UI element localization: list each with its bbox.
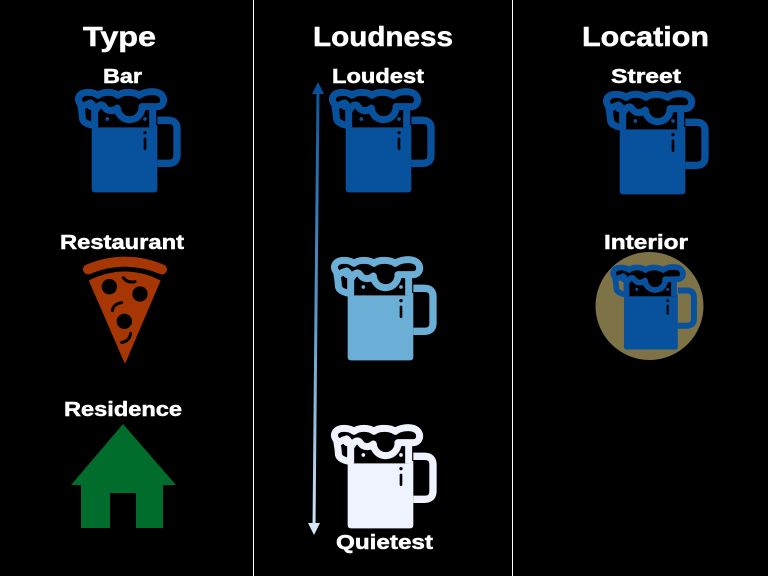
panel: loudness — [308, 21, 453, 554]
icon: pizza slice — [88, 262, 162, 363]
icon: interior beer mug — [613, 267, 694, 350]
panel: location — [582, 21, 709, 360]
label: Street: Street — [611, 66, 681, 88]
label: Residence: Residence — [64, 399, 182, 421]
heading: Location: Location — [582, 21, 709, 52]
label: Restaurant: Restaurant — [60, 232, 184, 254]
label: Loudest: Loudest — [332, 66, 424, 88]
icon: quiet beer mug — [334, 428, 433, 528]
label: Quietest: Quietest — [336, 532, 433, 554]
divider: right — [512, 0, 513, 576]
panel: type — [60, 21, 184, 528]
heading: Type: Type — [83, 21, 156, 52]
arrow: loudness scale — [308, 82, 324, 535]
heading: Loudness: Loudness — [313, 21, 453, 52]
icon: medium beer mug — [334, 260, 433, 360]
label: Interior: Interior — [604, 232, 688, 254]
icon: interior circle — [596, 252, 704, 360]
icon: house — [71, 424, 176, 528]
icon: loud beer mug — [332, 92, 431, 192]
divider: left — [253, 0, 254, 576]
icon: street beer mug — [606, 94, 705, 194]
label: Bar: Bar — [103, 66, 142, 88]
icon: bar beer mug — [78, 92, 177, 192]
